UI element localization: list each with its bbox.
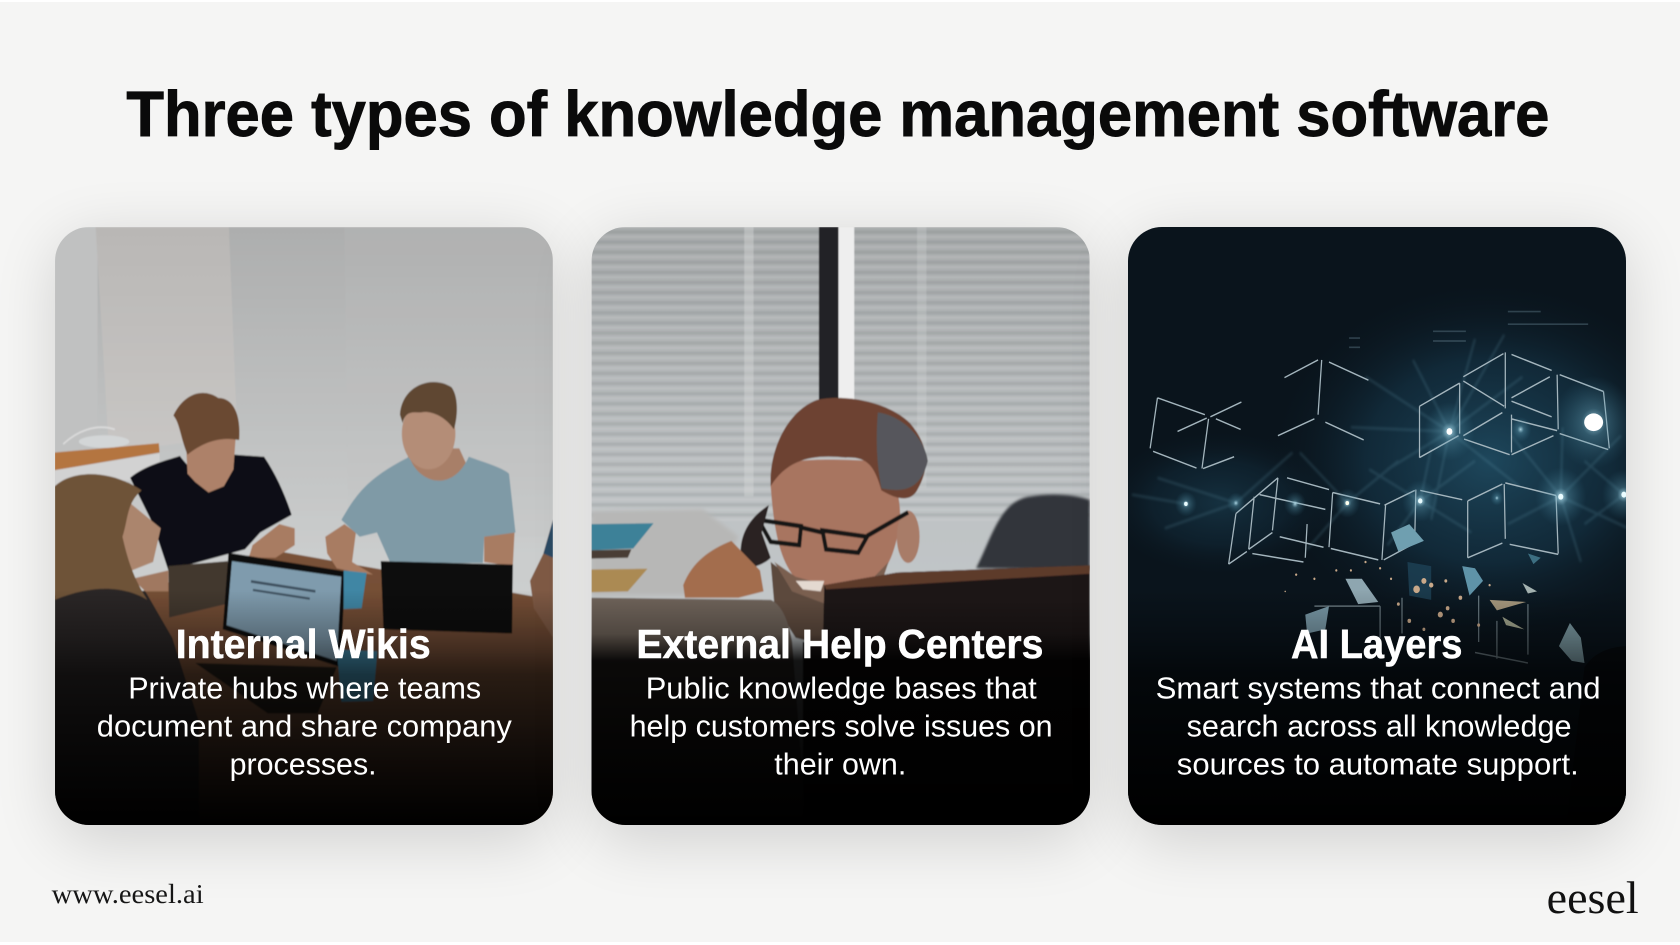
middle person — [130, 393, 295, 591]
desk clutter — [591, 509, 739, 596]
card description: Public knowledge bases that — [646, 671, 1037, 706]
blue mugs — [344, 570, 367, 609]
right arm — [530, 552, 553, 636]
panel: external help centers — [591, 227, 1090, 840]
left laptop — [591, 598, 806, 825]
card description: help customers solve issues on — [630, 709, 1053, 744]
photo: wireframe cubes — [1128, 227, 1626, 825]
faint dashes — [1349, 312, 1588, 347]
panel: internal wikis — [55, 227, 553, 840]
debris — [1284, 561, 1491, 631]
table — [142, 551, 553, 825]
glasses — [759, 512, 908, 553]
lights — [1560, 382, 1626, 460]
card heading: External Help Centers — [636, 621, 1043, 667]
card description: their own. — [774, 746, 906, 782]
card description — [97, 671, 512, 782]
card description — [630, 671, 1053, 782]
silhouette — [1595, 647, 1626, 825]
light rays — [1132, 335, 1628, 562]
man — [683, 398, 928, 646]
black laptop — [381, 561, 513, 634]
left woman — [55, 474, 199, 825]
shards — [1391, 524, 1424, 551]
right person — [325, 382, 515, 575]
card description — [1156, 671, 1601, 782]
card heading: AI Layers — [1291, 621, 1462, 667]
card description: processes. — [230, 746, 377, 782]
photo: man on phone — [591, 227, 1090, 827]
card heading: Internal Wikis — [176, 621, 431, 667]
website url: www.eesel.ai — [52, 879, 204, 909]
card description: document and share company — [97, 709, 512, 744]
panel: ai layers — [1095, 227, 1680, 840]
open laptop with screen — [223, 553, 345, 667]
brand wordmark: eesel — [1547, 873, 1639, 923]
wire cubes — [1150, 352, 1609, 663]
monitor — [819, 565, 1090, 825]
card description: Smart systems that connect and — [1156, 671, 1601, 706]
card description: sources to automate support. — [1177, 746, 1579, 782]
card description: search across all knowledge — [1187, 709, 1572, 744]
photo: team meeting — [55, 227, 553, 825]
brown laptop — [168, 561, 228, 618]
dark bag — [976, 494, 1090, 570]
card description: Private hubs where teams — [128, 671, 481, 706]
phone and hand — [741, 505, 771, 567]
title: Three types of knowledge management software — [126, 78, 1549, 150]
